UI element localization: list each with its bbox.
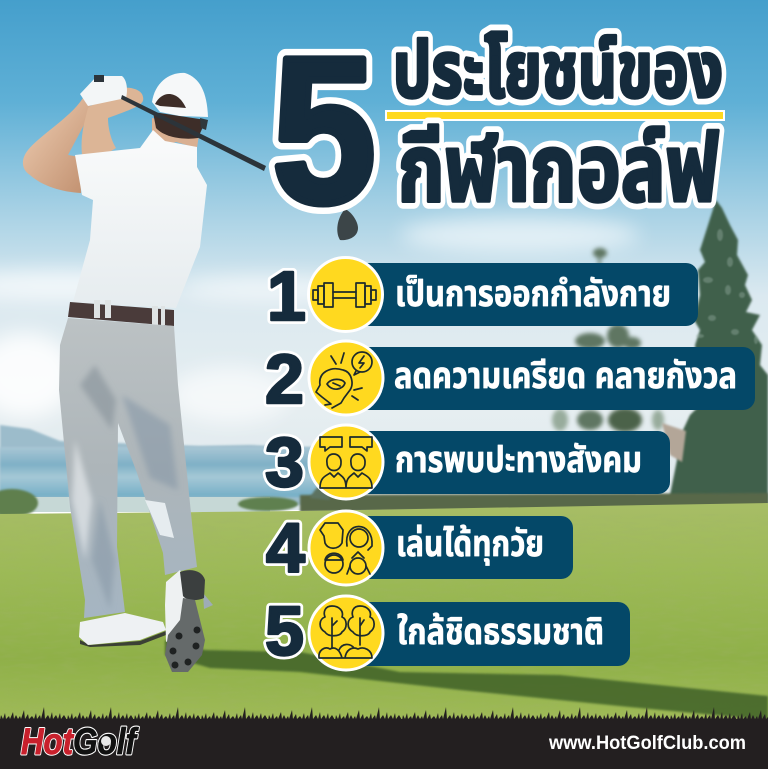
HotGolf logo xyxy=(21,721,139,762)
pill 4 label: เล่นได้ทุกวัย xyxy=(396,523,544,565)
HotGolf logo: Hot xyxy=(21,721,74,762)
golfer: left shoe xyxy=(79,613,166,647)
footer bar with grass silhouette xyxy=(0,704,768,769)
golfer: right shoe sole with spikes xyxy=(165,570,213,672)
golfer photo figure xyxy=(23,73,358,672)
background: sky xyxy=(0,0,768,510)
number 3: 3 xyxy=(265,423,304,501)
golfer: sunglasses xyxy=(200,118,208,130)
background: fairway grass xyxy=(0,503,768,725)
pill 3 xyxy=(345,431,670,494)
golfer: rear arm xyxy=(23,98,93,193)
big number 5: 5 xyxy=(272,15,376,247)
benefit row 4 xyxy=(266,509,573,587)
icon badge 2: stressed head xyxy=(309,341,383,415)
benefit row 5 xyxy=(265,592,630,670)
pill 4 xyxy=(345,516,573,579)
HotGolf logo: Golf xyxy=(73,721,139,762)
pill 3 label: การพบปะทางสังคม xyxy=(395,439,642,480)
icon badge 3: two people talking xyxy=(309,425,383,499)
website address: www.HotGolfClub.com xyxy=(548,733,746,754)
HotGolf logo: Golf xyxy=(73,721,139,762)
background: pine trees xyxy=(300,200,768,512)
icon badge 4: family xyxy=(309,511,383,585)
number 4: 4 xyxy=(266,509,305,587)
number 3: 3 xyxy=(265,423,304,501)
pill 5 label: ใกล้ชิดธรรมชาติ xyxy=(397,611,604,652)
background: clouds xyxy=(0,217,640,423)
icon badge 1: dumbbell xyxy=(308,258,382,332)
HotGolf logo: Hot xyxy=(21,721,74,762)
pill 1 label: เป็นการออกกำลังกาย xyxy=(395,273,671,314)
golfer: hair xyxy=(153,112,206,139)
pill 1 xyxy=(345,263,698,326)
pill 5 xyxy=(345,602,630,666)
golfer: belt xyxy=(68,300,174,326)
golfer: white cap xyxy=(152,73,208,117)
pill 2 xyxy=(345,347,755,410)
golfer: golf club xyxy=(94,75,358,240)
number 5: 5 xyxy=(265,592,304,670)
number 1: 1 xyxy=(267,257,306,335)
big number 5: 5 xyxy=(272,15,376,247)
golfer: neck xyxy=(152,118,200,150)
number 5: 5 xyxy=(265,592,304,670)
number 2: 2 xyxy=(265,340,304,418)
number 1: 1 xyxy=(267,257,306,335)
yellow heading divider xyxy=(386,111,724,120)
number 4: 4 xyxy=(266,509,305,587)
golfer: grey trousers xyxy=(59,318,197,618)
fairway grass texture xyxy=(0,514,768,719)
golfer: white glove xyxy=(80,76,127,106)
benefit row 3 xyxy=(265,423,670,501)
golfer shadow on grass xyxy=(165,640,768,720)
background: distant sea and hills xyxy=(0,425,340,517)
golfer: cap opening xyxy=(155,94,186,108)
number 2: 2 xyxy=(265,340,304,418)
benefit row 2 xyxy=(265,340,755,418)
benefit row 1 xyxy=(267,257,698,335)
golfer: white polo shirt xyxy=(73,130,207,308)
golfer: front forearm and hand xyxy=(82,88,143,158)
icon badge 5: trees and bushes xyxy=(309,596,383,670)
